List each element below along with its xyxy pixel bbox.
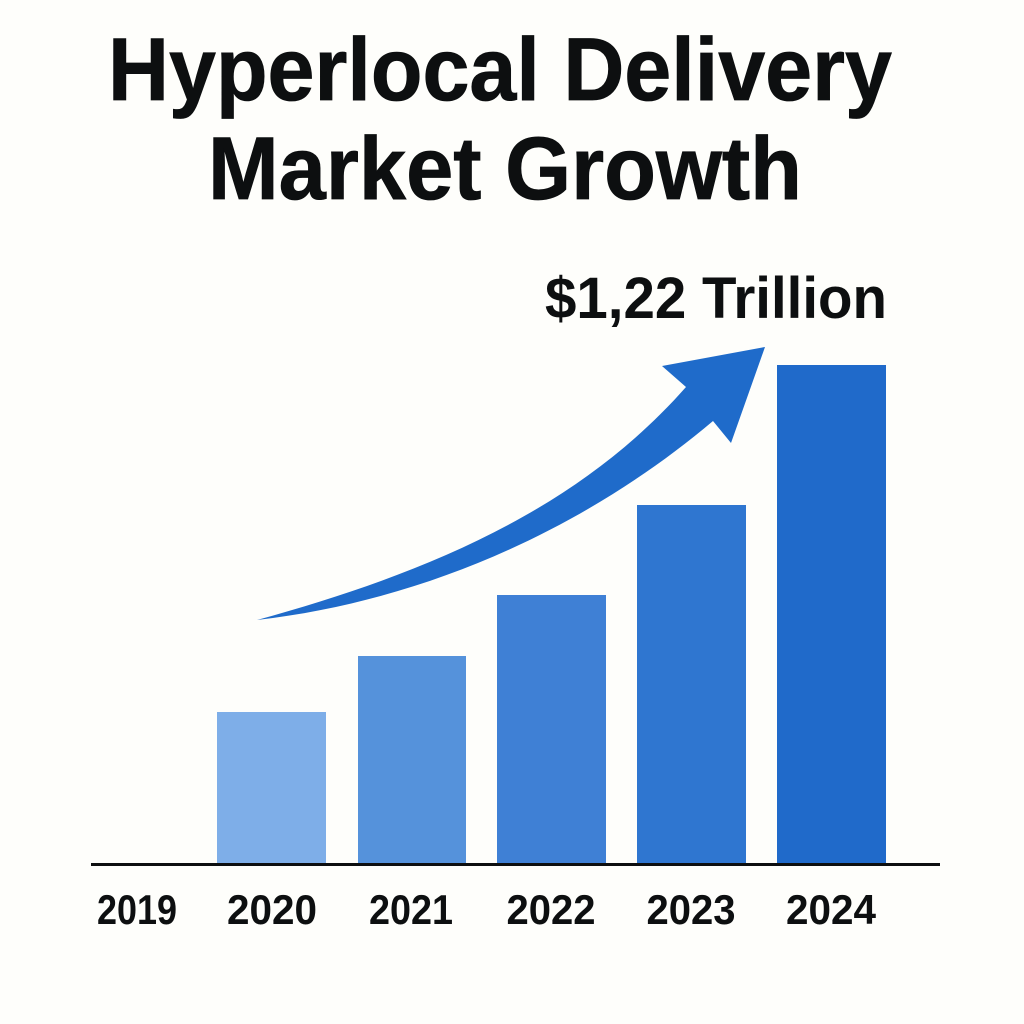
year labels: 2019 bbox=[97, 886, 177, 933]
bar: 2024 bbox=[777, 365, 886, 864]
title: Hyperlocal Delivery bbox=[108, 19, 892, 119]
year labels: 2023 bbox=[646, 886, 736, 933]
growth arrow bbox=[257, 347, 765, 620]
bar chart bbox=[91, 365, 940, 866]
year labels: 2022 bbox=[506, 886, 596, 933]
bar: 2021 bbox=[358, 656, 466, 864]
value callout: $1,22 Trillion bbox=[545, 266, 887, 331]
axis line bbox=[91, 863, 940, 866]
title: Market Growth bbox=[208, 118, 802, 218]
title bbox=[108, 19, 892, 218]
year labels: 2021 bbox=[369, 886, 453, 933]
year labels: 2024 bbox=[786, 886, 877, 933]
year labels: 2020 bbox=[227, 886, 317, 933]
bar: 2023 bbox=[637, 505, 746, 864]
bar: 2020 bbox=[217, 712, 326, 864]
bar: 2022 bbox=[497, 595, 606, 864]
year labels bbox=[97, 886, 877, 933]
